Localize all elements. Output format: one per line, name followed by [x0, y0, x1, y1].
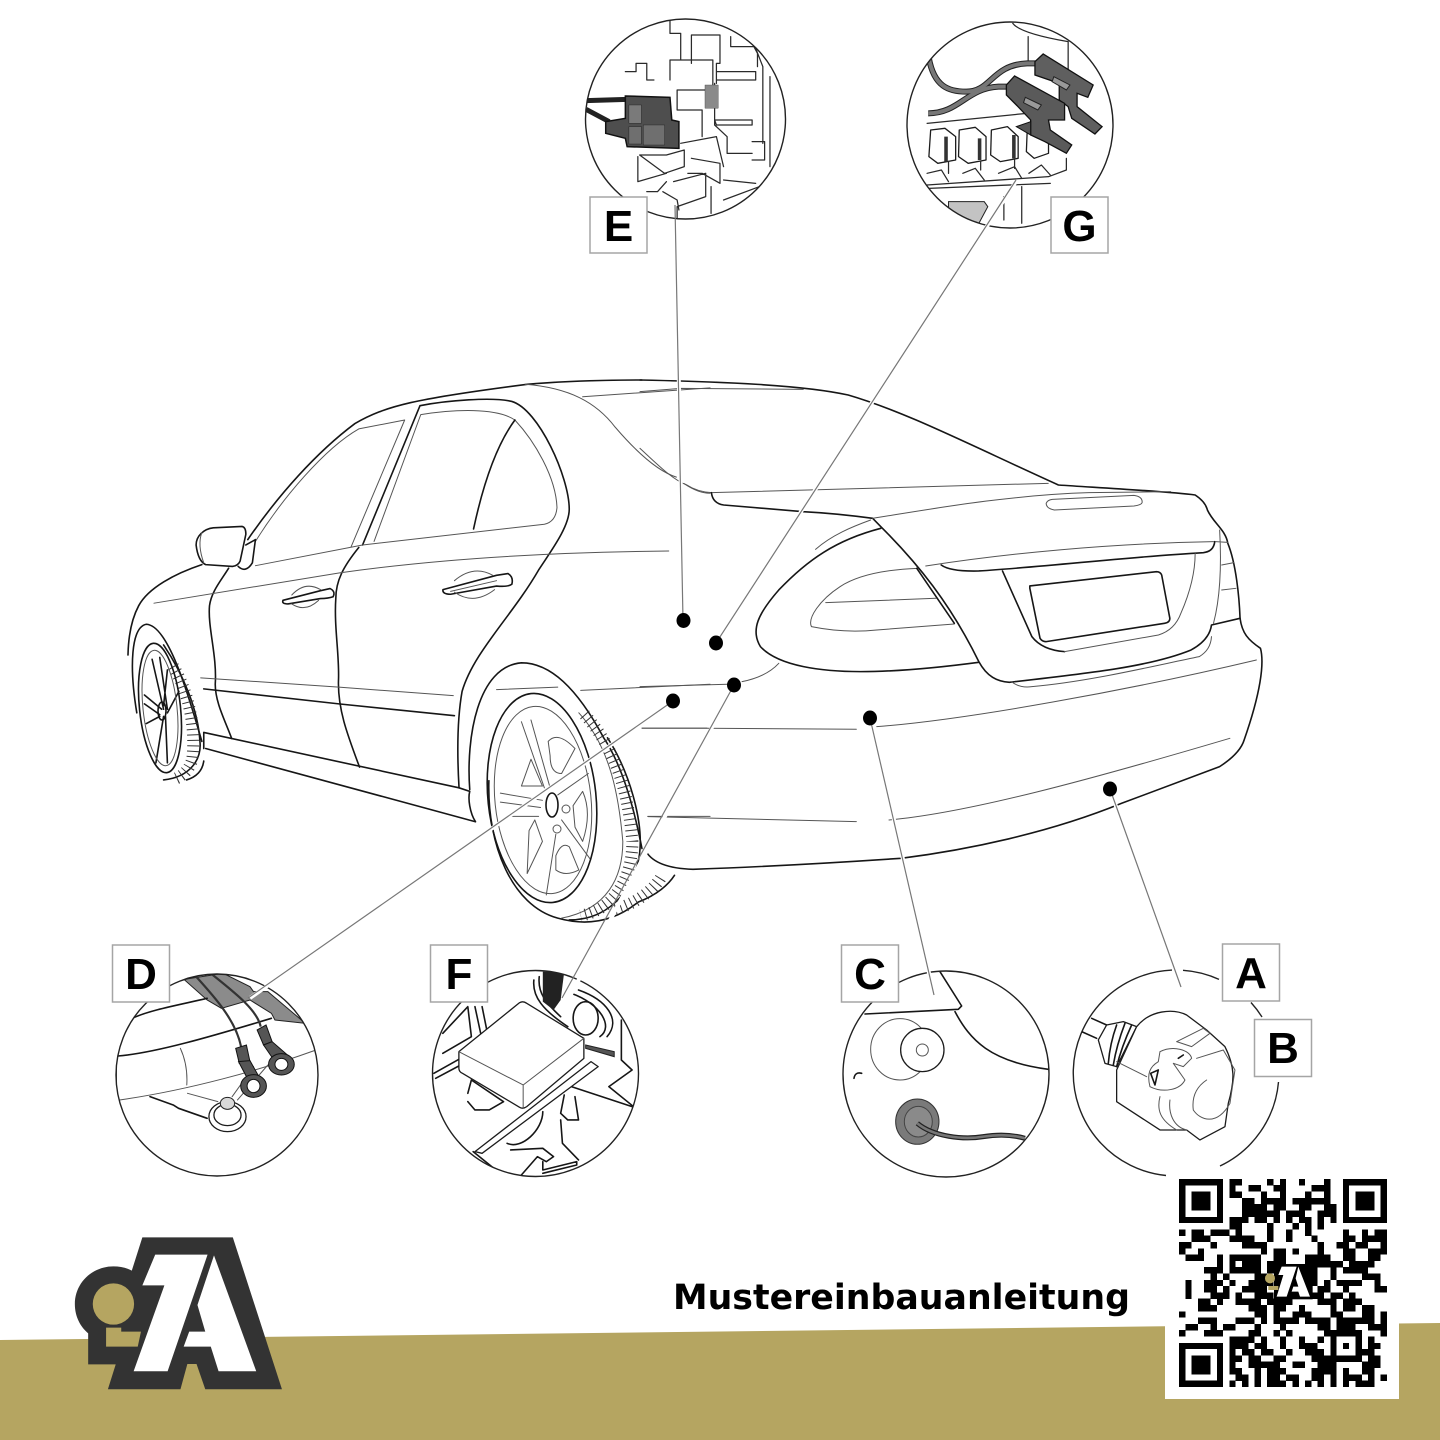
QR code panel: [1165, 1182, 1399, 1399]
connection point dots: [666, 613, 1117, 796]
label G: [1051, 197, 1108, 253]
module box: [459, 1002, 584, 1108]
ring terminals: [236, 1025, 294, 1097]
label D: D: [125, 950, 157, 999]
car rear: [640, 380, 1262, 869]
label C: [842, 945, 898, 1002]
label A: A: [1235, 949, 1267, 998]
tail lamp: [756, 520, 979, 672]
detail circle A/B: trailer socket: [1073, 970, 1278, 1176]
label B: B: [1267, 1024, 1299, 1073]
rear door handle: [443, 571, 512, 598]
cable: [917, 1123, 1025, 1138]
label D: [112, 945, 170, 1002]
ground wires: [195, 973, 261, 1047]
label F: [430, 945, 488, 1002]
QR modules: [1179, 1182, 1387, 1384]
front door handle: [283, 586, 334, 608]
dark connector: [606, 96, 679, 148]
heading: Mustereinbauanleitung: [673, 1278, 1130, 1318]
module base plate: [475, 1062, 598, 1153]
licence plate: [1030, 572, 1170, 642]
wheel rims: [133, 641, 607, 908]
label E: [590, 197, 647, 253]
detail circle E: connector on fuse box: [586, 19, 786, 219]
detail circle D: ground wires and nut: [116, 973, 318, 1176]
label G: G: [1062, 202, 1097, 251]
wires: [586, 99, 627, 122]
label A: [1222, 944, 1280, 1001]
leader lines: [248, 180, 1181, 1000]
nut: [209, 1097, 246, 1132]
label E: E: [604, 202, 633, 251]
car illustration: [128, 380, 1262, 922]
dark connector pair: [1006, 54, 1102, 153]
QR centre logo: [1265, 1264, 1313, 1299]
detail circle G: connectors on relay row: [907, 22, 1113, 228]
front wheel spokes and tread: [144, 645, 204, 780]
wires: [928, 58, 1038, 113]
grommet: [896, 1099, 939, 1144]
detail circle C: bumper grommet: [843, 971, 1049, 1177]
label C: C: [854, 950, 886, 999]
socket body: [1117, 1011, 1233, 1140]
rubber boot: [1098, 1022, 1137, 1067]
fuse marker: [705, 85, 718, 108]
logo: [75, 1237, 282, 1389]
label F: F: [446, 950, 472, 999]
gold footer band: [0, 1323, 1440, 1440]
rear wheel spokes: [500, 720, 590, 895]
rear tyre tread: [489, 713, 674, 922]
detail circle F: control module: [432, 970, 638, 1176]
relays: [927, 127, 1050, 182]
door mirror: [196, 526, 255, 569]
brake light: [1046, 495, 1142, 510]
label B: [1254, 1020, 1312, 1076]
car side and front: [128, 380, 710, 922]
